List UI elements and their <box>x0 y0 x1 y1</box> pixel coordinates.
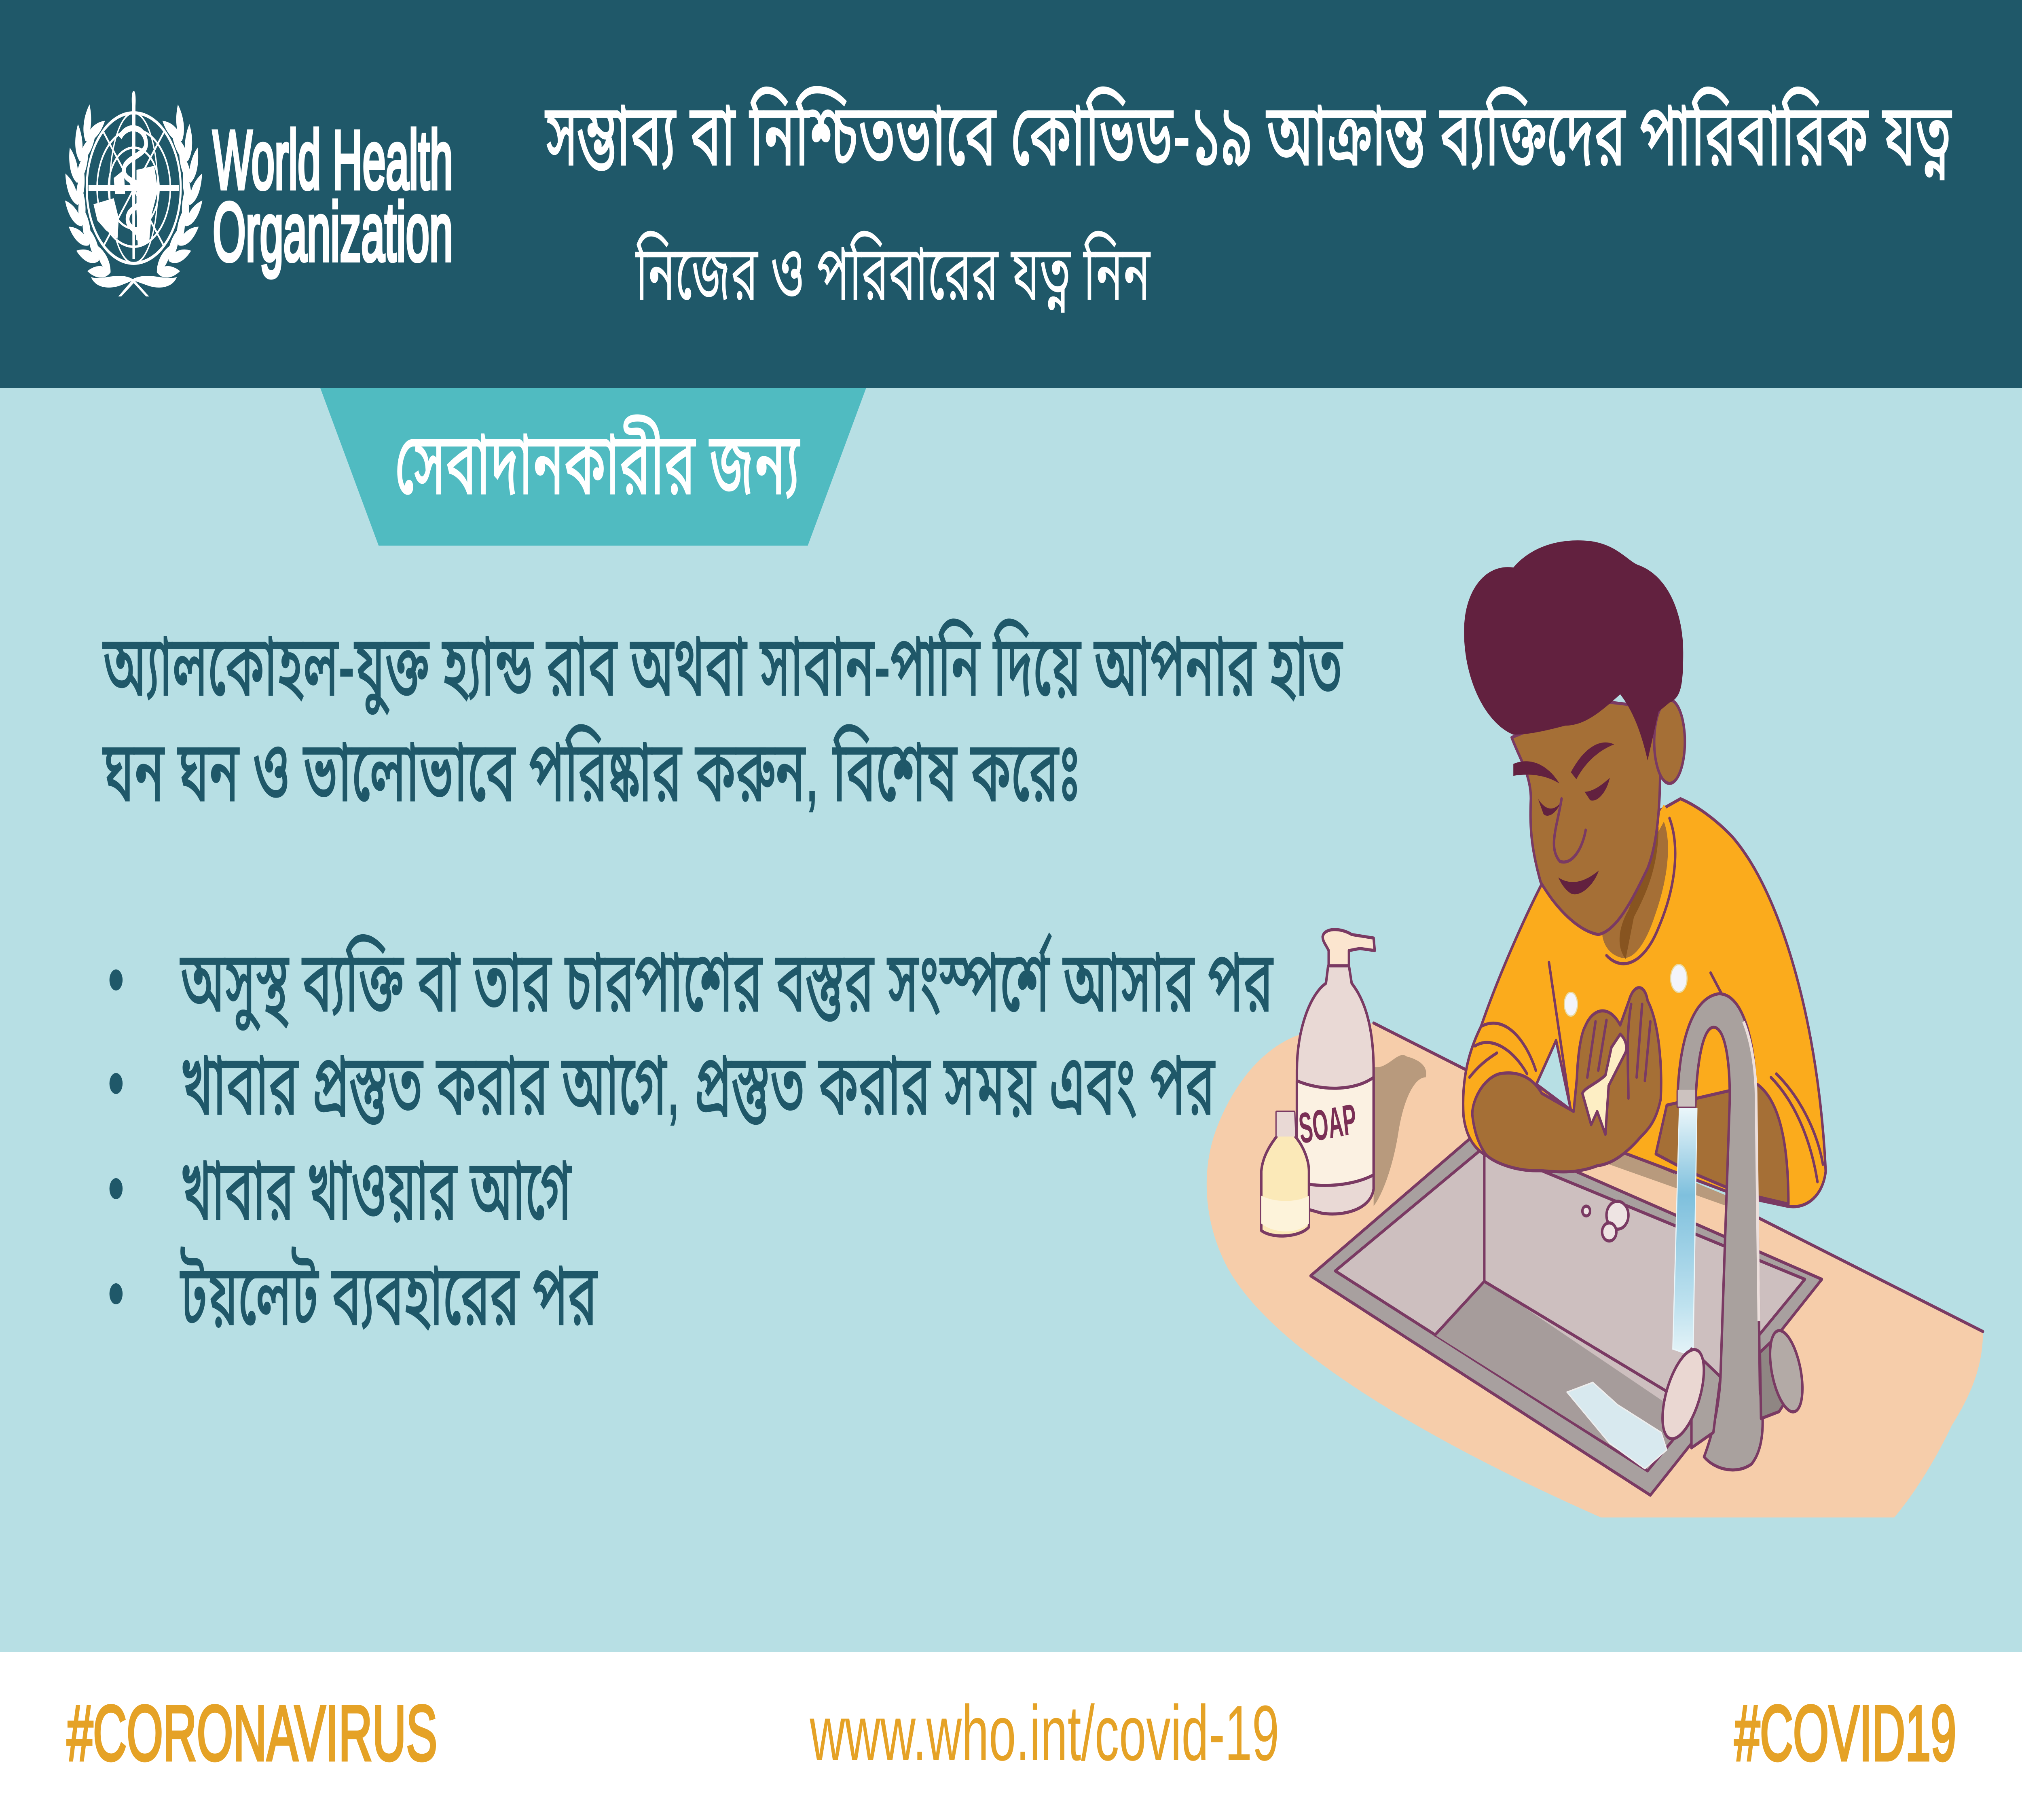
header band <box>0 0 2022 388</box>
foam drops on shirt <box>1564 965 1687 1016</box>
hands and arm <box>1472 988 1661 1172</box>
banner heading: সেবাদানকারীর জন্য <box>395 414 800 512</box>
logo wordmark line 1: World Health <box>213 114 453 206</box>
bullet 4: টয়লেট ব্যবহারের পর <box>180 1247 598 1343</box>
bullet list <box>110 933 1273 1343</box>
person <box>1463 540 1826 1207</box>
left handle <box>1692 1349 1720 1448</box>
intro line 1: অ্যালকোহল-যুক্ত হ্যান্ড রাব অথবা সাবান-পানি দিয়ে আপনার হাত <box>103 619 1343 715</box>
right handle <box>1760 1331 1801 1418</box>
neck and collar <box>1598 813 1672 963</box>
intro text <box>103 619 1343 819</box>
hair <box>1464 540 1683 760</box>
logo: World Health Organization <box>62 91 453 296</box>
footer band <box>0 1652 2022 1820</box>
intro line 2: ঘন ঘন ও ভালোভাবে পরিষ্কার করুন, বিশেষ করেঃ <box>103 724 1081 819</box>
running water <box>1673 1109 1697 1356</box>
right sleeve arm <box>1656 1084 1788 1204</box>
counter top <box>1207 1023 1983 1517</box>
gap between arm and body <box>1536 1040 1571 1110</box>
head <box>1464 540 1685 935</box>
hashtag: coronavirus: #CORONAVIRUS <box>67 1690 437 1777</box>
soap label: SOAP <box>1297 1095 1359 1153</box>
mouth <box>1558 870 1599 894</box>
shirt <box>1463 799 1826 1207</box>
subtitle: নিজের ও পরিবারের যত্ন নিন <box>635 231 1151 316</box>
bullet 2: খাবার প্রস্তুত করার আগে, প্রস্তুত করার সময় এবং পর <box>180 1038 1216 1133</box>
bullet 1: অসুস্থ ব্যক্তি বা তার চারপাশের বস্তুর সংস্পর্শে আসার পর <box>180 933 1273 1031</box>
icon: WHO emblem <box>62 91 205 296</box>
soap bubbles <box>1582 1201 1629 1241</box>
banner: for caregivers <box>320 388 866 546</box>
bullet dots <box>110 969 123 1304</box>
title: সম্ভাব্য বা নিশ্চিতভাবে কোভিড-১৯ আক্রান্ত ব্যক্তিদের পারিবারিক যত্ন <box>545 86 1952 184</box>
soap bottle <box>1297 929 1375 1214</box>
faucet <box>1654 994 1808 1470</box>
sleeve cuff <box>1470 1023 1536 1077</box>
soapy water at drain <box>1567 1382 1667 1469</box>
logo wordmark line 2: Organization <box>213 186 453 278</box>
eyes <box>1538 778 1610 816</box>
soap foam <box>1582 1034 1626 1134</box>
illustration: person washing hands at sink <box>1207 540 1983 1517</box>
nose <box>1554 799 1586 862</box>
small bottle <box>1261 1112 1309 1236</box>
eyebrows <box>1513 743 1614 783</box>
website url: www.who.int/covid-19 <box>810 1690 1279 1777</box>
bullet 3: খাবার খাওয়ার আগে <box>180 1143 572 1238</box>
face <box>1512 701 1660 935</box>
hashtag: covid19: #COVID19 <box>1734 1690 1956 1777</box>
ear <box>1654 700 1685 783</box>
sink <box>1311 1130 1822 1495</box>
